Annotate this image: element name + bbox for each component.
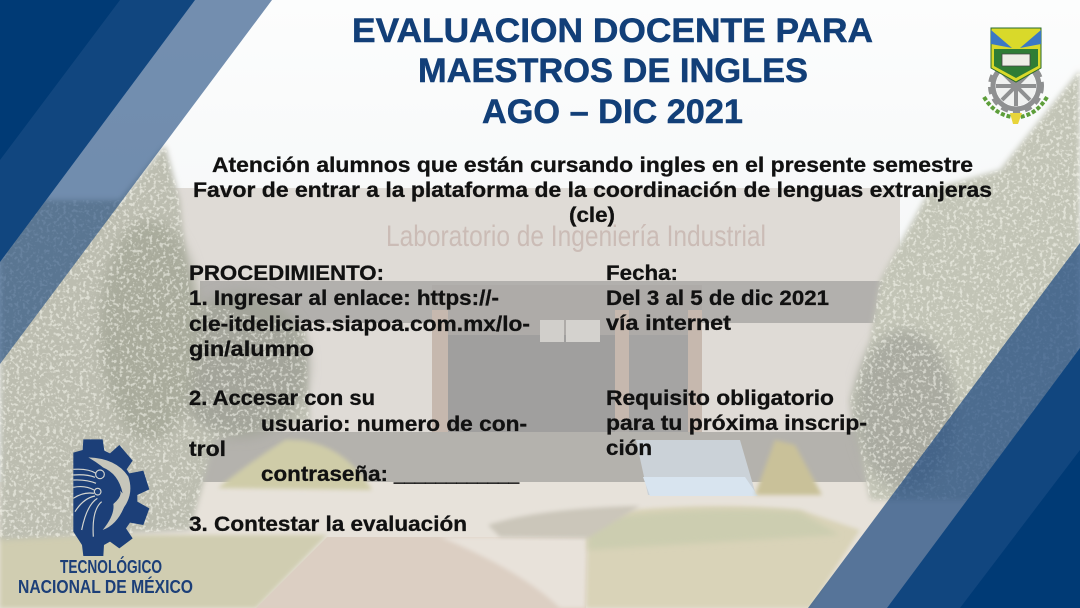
entrance windows bbox=[448, 335, 615, 440]
procedure text block: PROCEDIMIENTO: bbox=[189, 262, 384, 285]
wet patch bbox=[488, 506, 640, 538]
dark base strip bbox=[190, 432, 880, 482]
right tree bbox=[850, 70, 1080, 500]
decorative stripes: top left bbox=[0, 0, 272, 364]
icon: Tecnológico Nacional gear logo with eagle bbox=[73, 439, 149, 556]
date and requirement text block: para tu próxima inscrip- bbox=[606, 412, 867, 435]
crest shield bbox=[991, 28, 1041, 82]
procedure text block bbox=[189, 262, 530, 536]
dark roof band bbox=[200, 281, 895, 323]
foliage speckle, left bbox=[0, 150, 315, 550]
entrance block bbox=[432, 285, 702, 475]
ground light band bbox=[0, 482, 1080, 608]
procedure text block: contraseña: bbox=[261, 463, 388, 486]
date and requirement text block: ción bbox=[606, 437, 652, 460]
foliage speckle, right bbox=[850, 70, 1080, 500]
inner dark tree behind text bbox=[172, 293, 308, 437]
eagle beak and face cut-out bbox=[88, 457, 130, 530]
logo caption bbox=[18, 556, 193, 597]
title: MAESTROS DE INGLES bbox=[418, 52, 808, 90]
entrance pillars bbox=[432, 310, 702, 440]
blue ramp bbox=[636, 440, 756, 495]
crest ribbon bbox=[1010, 113, 1022, 124]
crest laurel bbox=[984, 97, 1047, 117]
icon: Delicias institute shield crest bbox=[984, 28, 1047, 124]
yellow shrub bbox=[755, 440, 822, 495]
announcement text: Favor de entrar a la plataforma de la coordinación de lenguas extranjeras bbox=[193, 179, 992, 202]
central path bbox=[256, 537, 588, 608]
date and requirement text block bbox=[606, 262, 867, 460]
date and requirement text block: Requisito obligatorio bbox=[606, 387, 834, 410]
date and requirement text block: Fecha: bbox=[606, 262, 678, 285]
procedure text block: gin/alumno bbox=[189, 338, 314, 361]
title bbox=[352, 12, 873, 131]
procedure text block: cle-itdelicias.siapoa.com.mx/lo- bbox=[189, 313, 530, 336]
building wall bbox=[170, 188, 900, 488]
building sign text: Laboratorio de Ingeniería Industrial bbox=[386, 220, 766, 253]
date and requirement text block: vía internet bbox=[606, 312, 731, 335]
procedure text block: 2. Accesar con su bbox=[189, 387, 375, 410]
logo caption: TECNOLÓGICO bbox=[60, 556, 162, 577]
left tree bbox=[0, 145, 310, 540]
announcement text bbox=[193, 154, 992, 227]
procedure text block: 3. Contestar la evaluación bbox=[189, 513, 467, 536]
crest gear bbox=[993, 63, 1039, 109]
procedure text block: ____________ bbox=[393, 463, 519, 486]
title: AGO – DIC 2021 bbox=[482, 93, 743, 131]
left lawn bbox=[0, 535, 327, 608]
decorative stripes: bottom right bbox=[808, 243, 1080, 608]
procedure text block: trol bbox=[189, 438, 226, 461]
date and requirement text block: Del 3 al 5 de dic 2021 bbox=[606, 287, 829, 310]
procedure text block: usuario: numero de con- bbox=[261, 413, 527, 436]
right lawn bbox=[586, 506, 860, 608]
title: EVALUACION DOCENTE PARA bbox=[352, 12, 873, 50]
grass mound bbox=[218, 440, 372, 490]
announcement text: Atención alumnos que están cursando ingles en el presente semestre bbox=[212, 154, 973, 177]
procedure text block: 1. Ingresar al enlace: https://- bbox=[189, 287, 499, 310]
logo caption: NACIONAL DE MÉXICO bbox=[18, 576, 193, 597]
announcement text: (cle) bbox=[569, 204, 615, 227]
